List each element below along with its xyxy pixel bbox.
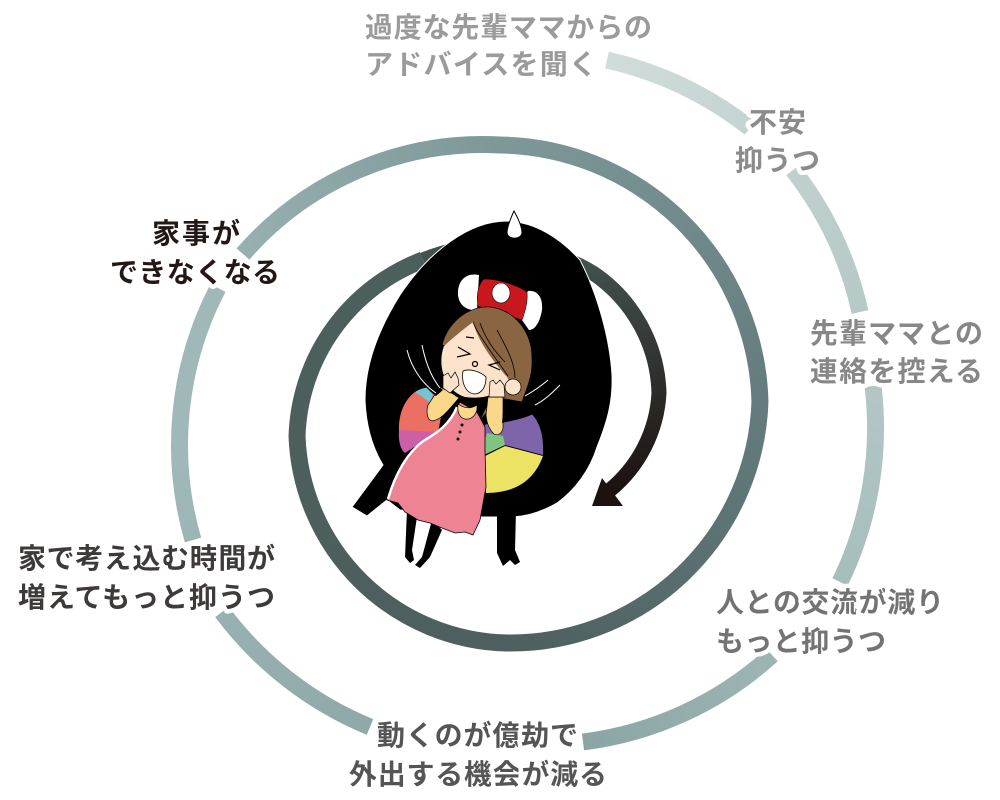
label: 家事ができなくなる: できなくなる	[110, 257, 280, 288]
dress buttons	[456, 424, 464, 440]
hair strands	[473, 322, 515, 378]
monster horn	[507, 211, 522, 238]
label: 先輩ママとの連絡を控える: 連絡を控える	[810, 356, 983, 387]
outer spiral arrow	[180, 60, 876, 742]
label: 動くのが億劫で外出する機会が減る: 動くのが億劫で	[377, 719, 578, 751]
collar	[458, 404, 477, 419]
label: 不安抑うつ: 不安	[749, 107, 806, 138]
label: 動くのが億劫で外出する機会が減る: 外出する機会が減る	[349, 758, 607, 790]
left rainbow shell	[399, 387, 445, 453]
label: 人との交流が減りもっと抑うつ: もっと抑うつ	[716, 626, 886, 657]
monster and mother character	[352, 211, 612, 568]
left sleeve	[427, 387, 459, 421]
label: 家で考え込む時間が増えてもっと抑うつ	[18, 542, 275, 613]
monster feet	[405, 510, 520, 568]
label: 先輩ママとの連絡を控える: 先輩ママとの	[810, 318, 983, 349]
label: 不安抑うつ: 抑うつ	[735, 145, 820, 176]
dress white edge	[388, 407, 457, 499]
monster body	[352, 221, 612, 517]
label: 過度な先輩ママからのアドバイスを聞く	[365, 12, 652, 80]
hands	[443, 372, 505, 397]
label: 不安抑うつ	[735, 107, 820, 176]
label: 家で考え込む時間が増えてもっと抑うつ: 家で考え込む時間が	[18, 542, 275, 574]
ear	[505, 379, 521, 395]
facial features	[457, 337, 500, 370]
label: 動くのが億劫で外出する機会が減る	[349, 719, 607, 790]
label: 人との交流が減りもっと抑うつ	[716, 586, 944, 657]
right rainbow shell	[483, 412, 543, 493]
dress	[387, 402, 486, 535]
middle spiral ring	[297, 145, 760, 643]
label: 過度な先輩ママからのアドバイスを聞く: アドバイスを聞く	[365, 49, 597, 80]
inner spiral arrow	[423, 246, 659, 506]
bow	[458, 274, 542, 330]
motion lines	[407, 345, 560, 405]
label: 家事ができなくなる	[110, 217, 280, 288]
right sleeve	[486, 397, 503, 435]
hair	[442, 307, 532, 420]
label: 過度な先輩ママからのアドバイスを聞く: 過度な先輩ママからの	[365, 12, 652, 43]
label: 人との交流が減りもっと抑うつ: 人との交流が減り	[716, 586, 944, 618]
monster arms	[405, 335, 557, 423]
mouth	[463, 370, 486, 394]
face	[441, 322, 510, 398]
label: 家事ができなくなる: 家事が	[152, 217, 240, 249]
label: 先輩ママとの連絡を控える	[810, 318, 983, 387]
label: 家で考え込む時間が増えてもっと抑うつ: 増えてもっと抑うつ	[18, 582, 275, 613]
